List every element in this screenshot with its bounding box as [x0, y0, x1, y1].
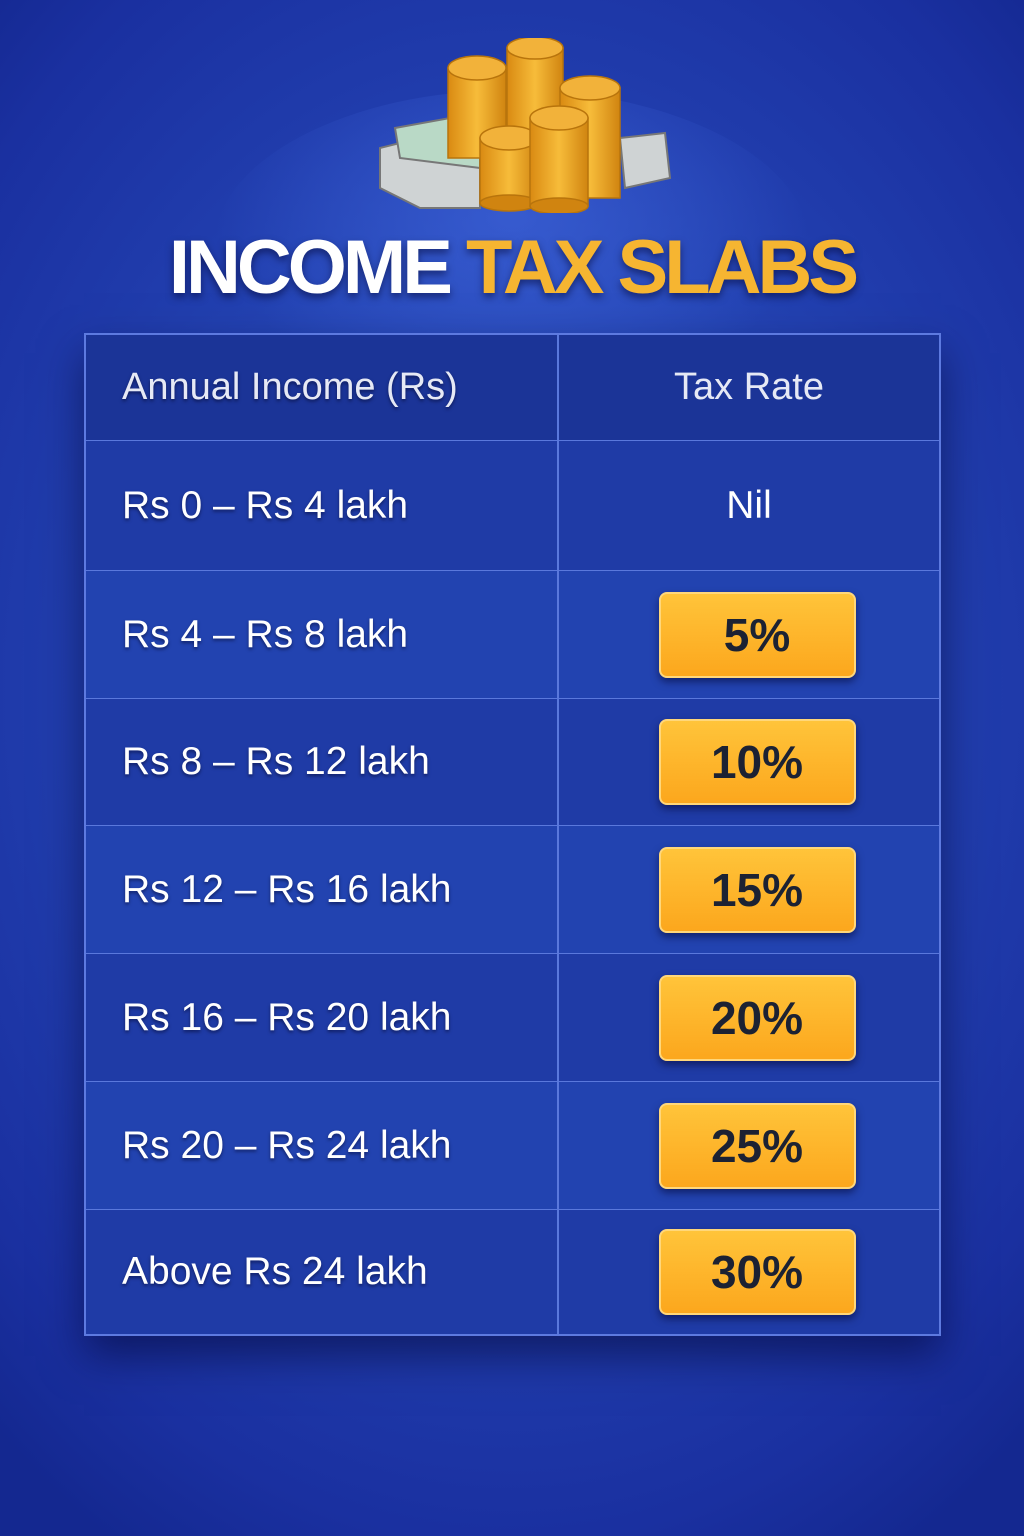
icon: coins and cash — [379, 38, 671, 213]
row 1: Nil — [726, 484, 772, 526]
row 2: Rs 4 – Rs 8 lakh — [122, 612, 408, 656]
row 7 — [86, 1209, 939, 1334]
row 4 — [86, 825, 939, 953]
row 7: 30% — [711, 1246, 803, 1298]
title: INCOME TAX SLABS — [169, 225, 855, 310]
row 4: 15% — [711, 864, 803, 916]
row 2: 5% — [724, 608, 790, 660]
table: tax slabs — [84, 333, 941, 1336]
row 3: Rs 8 – Rs 12 lakh — [122, 740, 430, 783]
row 5 — [86, 953, 939, 1081]
row 5: Rs 16 – Rs 20 lakh — [122, 996, 452, 1038]
row 4: Rs 12 – Rs 16 lakh — [122, 868, 452, 910]
row 5: 20% — [711, 992, 803, 1044]
row 2 — [86, 570, 939, 698]
header row: Annual Income (Rs) — [122, 366, 458, 408]
header row — [86, 335, 939, 440]
row 3 — [86, 698, 939, 825]
row 6 — [86, 1081, 939, 1209]
row 1 — [86, 440, 939, 570]
row 6: Rs 20 – Rs 24 lakh — [122, 1124, 452, 1166]
row 7: Above Rs 24 lakh — [122, 1250, 428, 1293]
row 6: 25% — [711, 1120, 803, 1172]
row 3: 10% — [711, 736, 803, 788]
row 1: Rs 0 – Rs 4 lakh — [122, 484, 408, 526]
header row: Tax Rate — [674, 366, 824, 408]
